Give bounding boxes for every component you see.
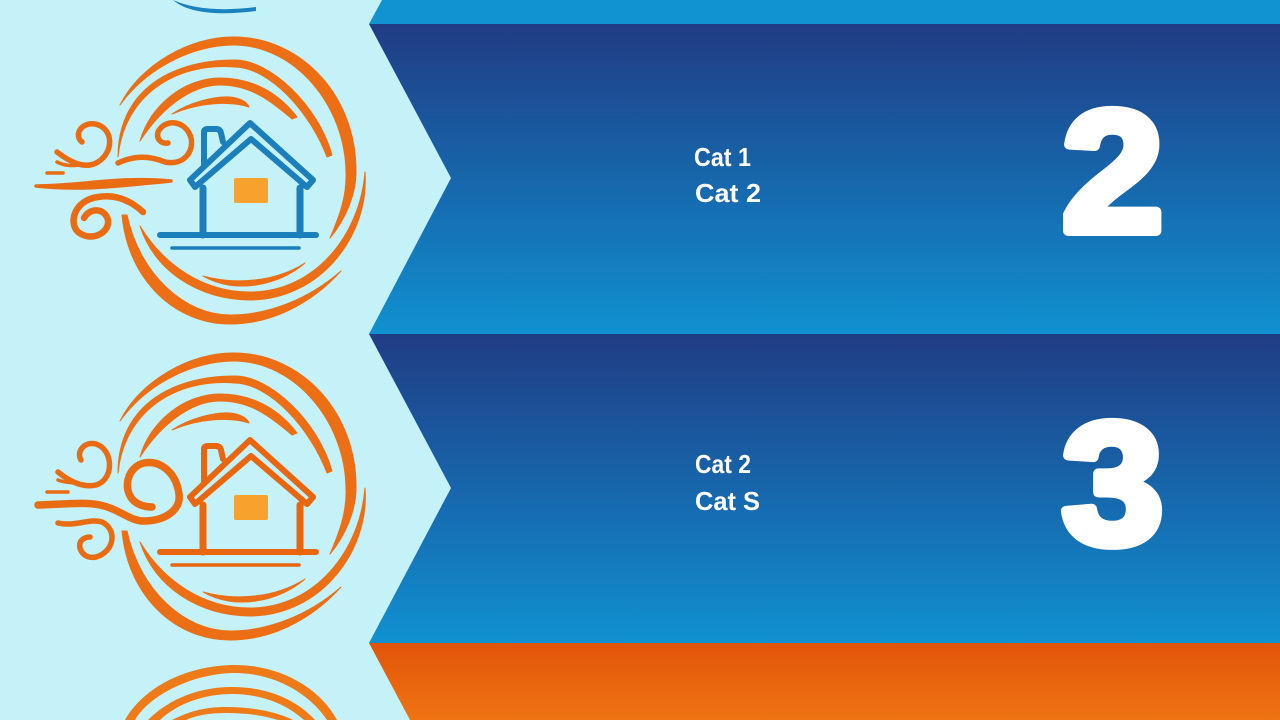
house (160, 123, 316, 248)
band: category 1 remainder (369, 0, 1280, 24)
band: category 4 (369, 643, 1280, 720)
window (234, 178, 268, 203)
label: category lines, band 2 (694, 142, 761, 208)
wind gusts (36, 123, 192, 237)
label: category lines, band 3 (695, 449, 760, 516)
wind gusts (38, 443, 179, 557)
icon: bottom orange rings (125, 665, 337, 720)
text: Cat 2: Cat 2 (695, 178, 761, 208)
text: Cat S: Cat S (695, 486, 760, 516)
band: category 2 (369, 24, 1280, 334)
number 3: 3 (1062, 388, 1163, 580)
band: category 3 (369, 334, 1280, 643)
icon: wind and house, orange (38, 353, 365, 640)
icon: top blue ring fragment (173, 0, 256, 13)
icon: wind and house, blue (36, 37, 365, 324)
text: Cat 1: Cat 1 (694, 142, 751, 172)
number 2: 2 (1062, 76, 1163, 268)
window (234, 495, 268, 520)
text: Cat 2: Cat 2 (695, 449, 751, 479)
house (160, 440, 316, 565)
